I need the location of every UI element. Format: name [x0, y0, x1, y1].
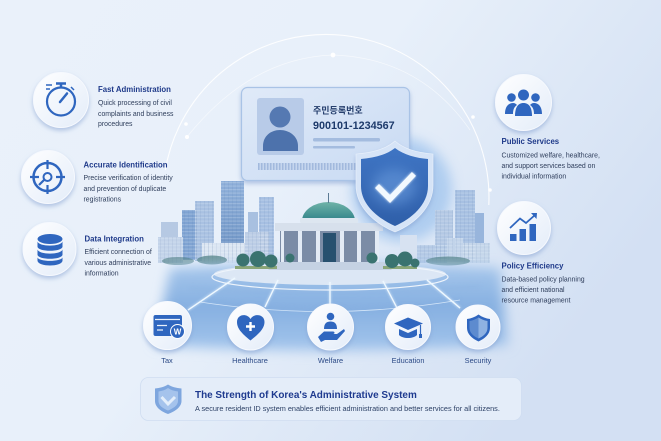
banner title: The Strength of Korea's Administrative System: [195, 390, 417, 401]
icon: heart: [228, 304, 274, 350]
national assembly building: [268, 193, 392, 270]
item: tax: [144, 302, 192, 365]
label: healthcare: Healthcare: [232, 356, 268, 365]
city skyline right: [400, 190, 490, 263]
text: policy efficiency: [502, 262, 585, 304]
text: accurate identification: registrations: [84, 196, 122, 204]
connector lines: [188, 278, 460, 310]
banner subtitle: A secure resident ID system enables efficient administration and better services for all citizens.: [195, 404, 500, 413]
ID label: 주민등록번호: [313, 104, 363, 116]
icon: chart: [498, 202, 550, 254]
text: policy efficiency: Policy Efficiency: [502, 262, 564, 270]
text: fast administration: Fast Administration: [98, 85, 171, 94]
ID number: 900101-1234567: [313, 120, 395, 132]
icon: banner shield: [155, 384, 182, 414]
text: data integration: various administrative: [84, 260, 151, 267]
icon: tax card: W: [174, 328, 182, 336]
ID photo: [257, 98, 304, 155]
text: accurate identification: and prevention of duplicate: [84, 186, 166, 193]
scene: city and plaza: [155, 138, 508, 350]
icon: database: [23, 222, 76, 276]
ID card: [242, 88, 410, 180]
item: welfare: [308, 304, 354, 365]
label: tax: Tax: [161, 356, 173, 365]
icon: graduation cap: [386, 304, 430, 350]
item: data integration: [23, 222, 152, 278]
icon: people: [496, 74, 552, 130]
label: security: Security: [465, 356, 492, 365]
item: security: [456, 305, 500, 365]
plaza rim: [214, 263, 446, 285]
text: accurate identification: Accurate Identification: [84, 160, 168, 170]
text: public services: [502, 137, 600, 180]
shield with check: [356, 141, 433, 232]
text: data integration: Data Integration: [84, 234, 144, 244]
text: policy efficiency: resource management: [502, 298, 571, 304]
item: fast administration: [34, 72, 174, 128]
ID lines: [313, 138, 380, 148]
text: fast administration: [98, 85, 174, 128]
text: policy efficiency: Data-based policy planning: [502, 276, 585, 284]
item: public services: [496, 74, 600, 180]
item: education: [386, 304, 430, 365]
text: data integration: information: [84, 270, 119, 278]
text: accurate identification: [84, 160, 173, 204]
text: fast administration: procedures: [98, 121, 133, 128]
item: healthcare: [228, 304, 274, 365]
plaza water: [155, 263, 508, 350]
barcode: [258, 163, 356, 170]
text: fast administration: Quick processing of civil: [98, 100, 172, 107]
text: public services: and support services based on: [502, 163, 596, 170]
item: policy efficiency: [498, 202, 585, 304]
blue haze behind shield: [352, 138, 452, 242]
text: data integration: Efficient connection of: [84, 249, 152, 256]
icon: target: [22, 150, 74, 204]
text: accurate identification: Precise verification of identity: [84, 175, 173, 182]
banner: [140, 378, 522, 420]
water streaks: [190, 286, 480, 310]
check mark: [379, 176, 412, 199]
text: public services: individual information: [502, 174, 566, 180]
item: accurate identification: [22, 150, 173, 204]
network arcs: [165, 34, 492, 205]
text: public services: Customized welfare, healthcare,: [502, 152, 600, 160]
text: policy efficiency: and efficient national: [502, 287, 565, 294]
city skyline left: [158, 181, 274, 263]
foreground trees: [235, 251, 420, 269]
text: fast administration: complaints and business: [98, 111, 174, 118]
icon: shield: [456, 305, 500, 349]
label: education: Education: [392, 356, 424, 365]
text: public services: Public Services: [502, 137, 560, 146]
distant trees: [162, 256, 470, 266]
label: welfare: Welfare: [318, 356, 343, 365]
icon: caring hand: [308, 304, 354, 350]
icon: stopwatch: [34, 72, 88, 128]
text: data integration: [84, 234, 152, 278]
